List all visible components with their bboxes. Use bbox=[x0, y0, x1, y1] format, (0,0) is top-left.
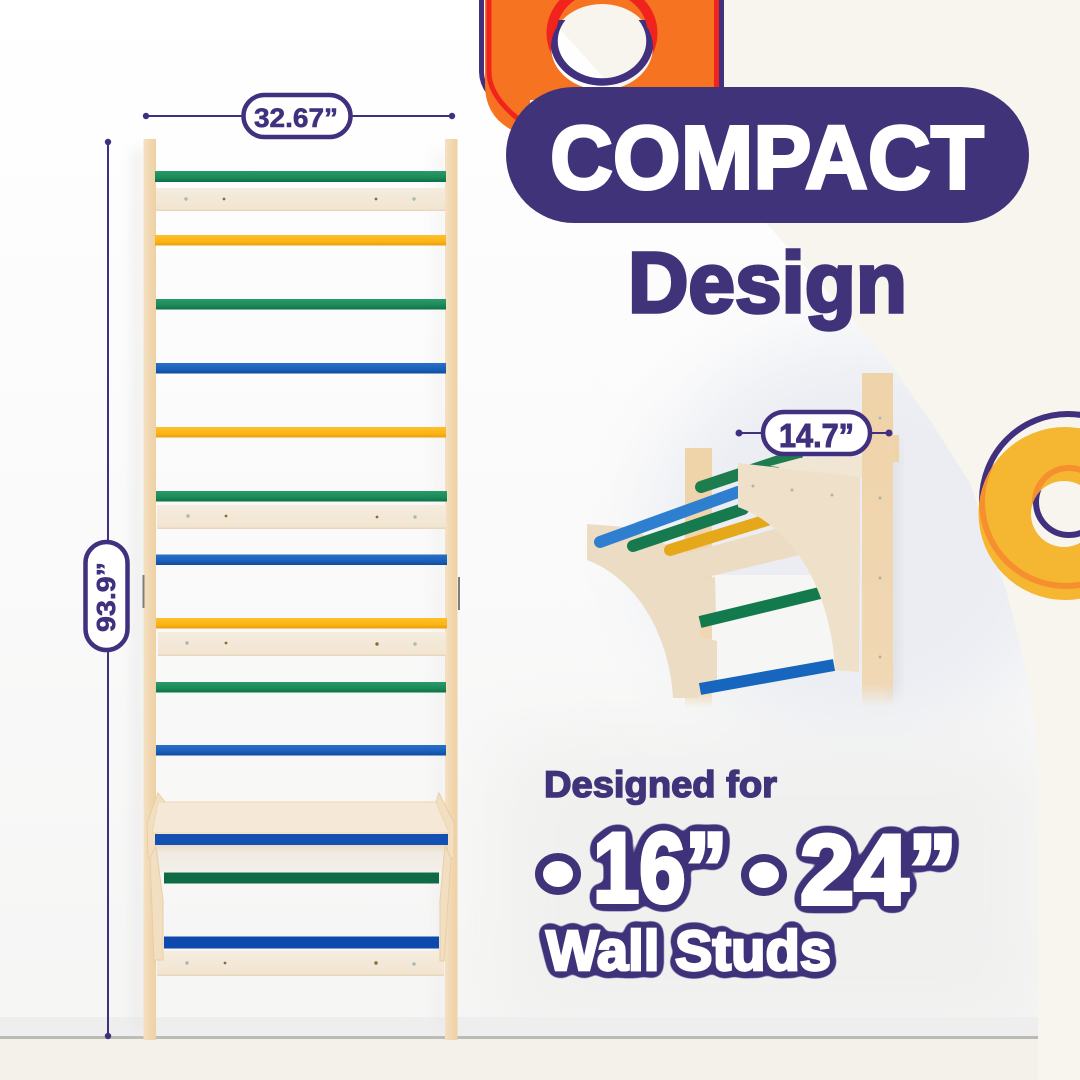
rail shadows bbox=[132, 150, 144, 1030]
wall ladder photo bbox=[132, 139, 460, 1040]
wooden slats bbox=[156, 188, 446, 976]
orange rings bbox=[979, 461, 1080, 589]
post screws bbox=[752, 416, 882, 658]
lower green rod bbox=[700, 593, 820, 622]
yellow donut body bbox=[978, 427, 1080, 600]
ladder side rails bbox=[144, 139, 156, 1040]
bench seat bbox=[152, 802, 449, 833]
purple ring bbox=[551, 20, 653, 86]
width label: 32.67” bbox=[254, 103, 338, 133]
bullet 16 bbox=[539, 857, 577, 891]
label 24: 24” bbox=[800, 814, 957, 925]
dimension: height 93.9 bbox=[86, 139, 128, 1039]
heading COMPACT: COMPACT bbox=[550, 108, 984, 208]
yellow rod bbox=[670, 520, 767, 550]
cross bar bbox=[687, 523, 812, 582]
orange square with hole bbox=[485, 0, 719, 137]
back post bbox=[685, 448, 712, 708]
side view product photo bbox=[587, 373, 899, 708]
soft wall shading bbox=[426, 342, 1080, 1036]
cream background curve bbox=[530, 0, 1080, 1080]
dimension: width 32.67 bbox=[143, 95, 455, 137]
depth label: 14.7” bbox=[779, 417, 854, 454]
blue rod bbox=[600, 492, 738, 542]
stud sizes bbox=[539, 812, 957, 925]
right bracket bbox=[738, 463, 860, 672]
lower blue rod bbox=[700, 665, 834, 689]
hinges bbox=[142, 575, 144, 608]
wall post bbox=[862, 373, 893, 707]
post block bbox=[893, 435, 899, 462]
red square outline bbox=[489, 0, 716, 118]
depth line bbox=[739, 432, 889, 434]
height label: 93.9” bbox=[91, 562, 121, 632]
decorative orange rounded square bbox=[482, 0, 722, 137]
width line bbox=[146, 115, 452, 117]
front post shadow bbox=[890, 440, 897, 695]
slat bolts bbox=[184, 197, 417, 966]
height pill bbox=[86, 542, 128, 650]
title pill bbox=[506, 87, 1029, 223]
lower bench board bbox=[157, 845, 445, 872]
purple outer ring bbox=[982, 414, 1080, 586]
red ring bbox=[546, 0, 658, 55]
back green rod bbox=[701, 455, 797, 487]
green mid rod bbox=[633, 509, 743, 546]
text: Wall Studs: Wall Studs bbox=[546, 919, 831, 983]
bench side supports bbox=[147, 793, 454, 961]
rungs bbox=[155, 171, 446, 182]
dimension: depth 14.7 bbox=[736, 412, 892, 454]
left bracket bbox=[587, 524, 717, 698]
depth pill bbox=[763, 412, 870, 454]
pill background bbox=[506, 87, 1029, 223]
text: Designed for: Designed for bbox=[544, 764, 777, 805]
height line bbox=[107, 142, 109, 1036]
label 16: 16” bbox=[593, 812, 727, 923]
heading Design: Design bbox=[628, 236, 907, 331]
floor bbox=[0, 1036, 1038, 1080]
lower rungs bbox=[155, 834, 448, 845]
purple inner ring bbox=[1033, 490, 1080, 538]
bullet 24 bbox=[745, 858, 783, 892]
purple square outline bbox=[482, 0, 722, 113]
wall panel between brackets bbox=[712, 575, 836, 690]
width pill bbox=[244, 95, 350, 137]
decorative yellow donut bbox=[978, 414, 1080, 600]
bracket top surface bbox=[770, 456, 862, 478]
